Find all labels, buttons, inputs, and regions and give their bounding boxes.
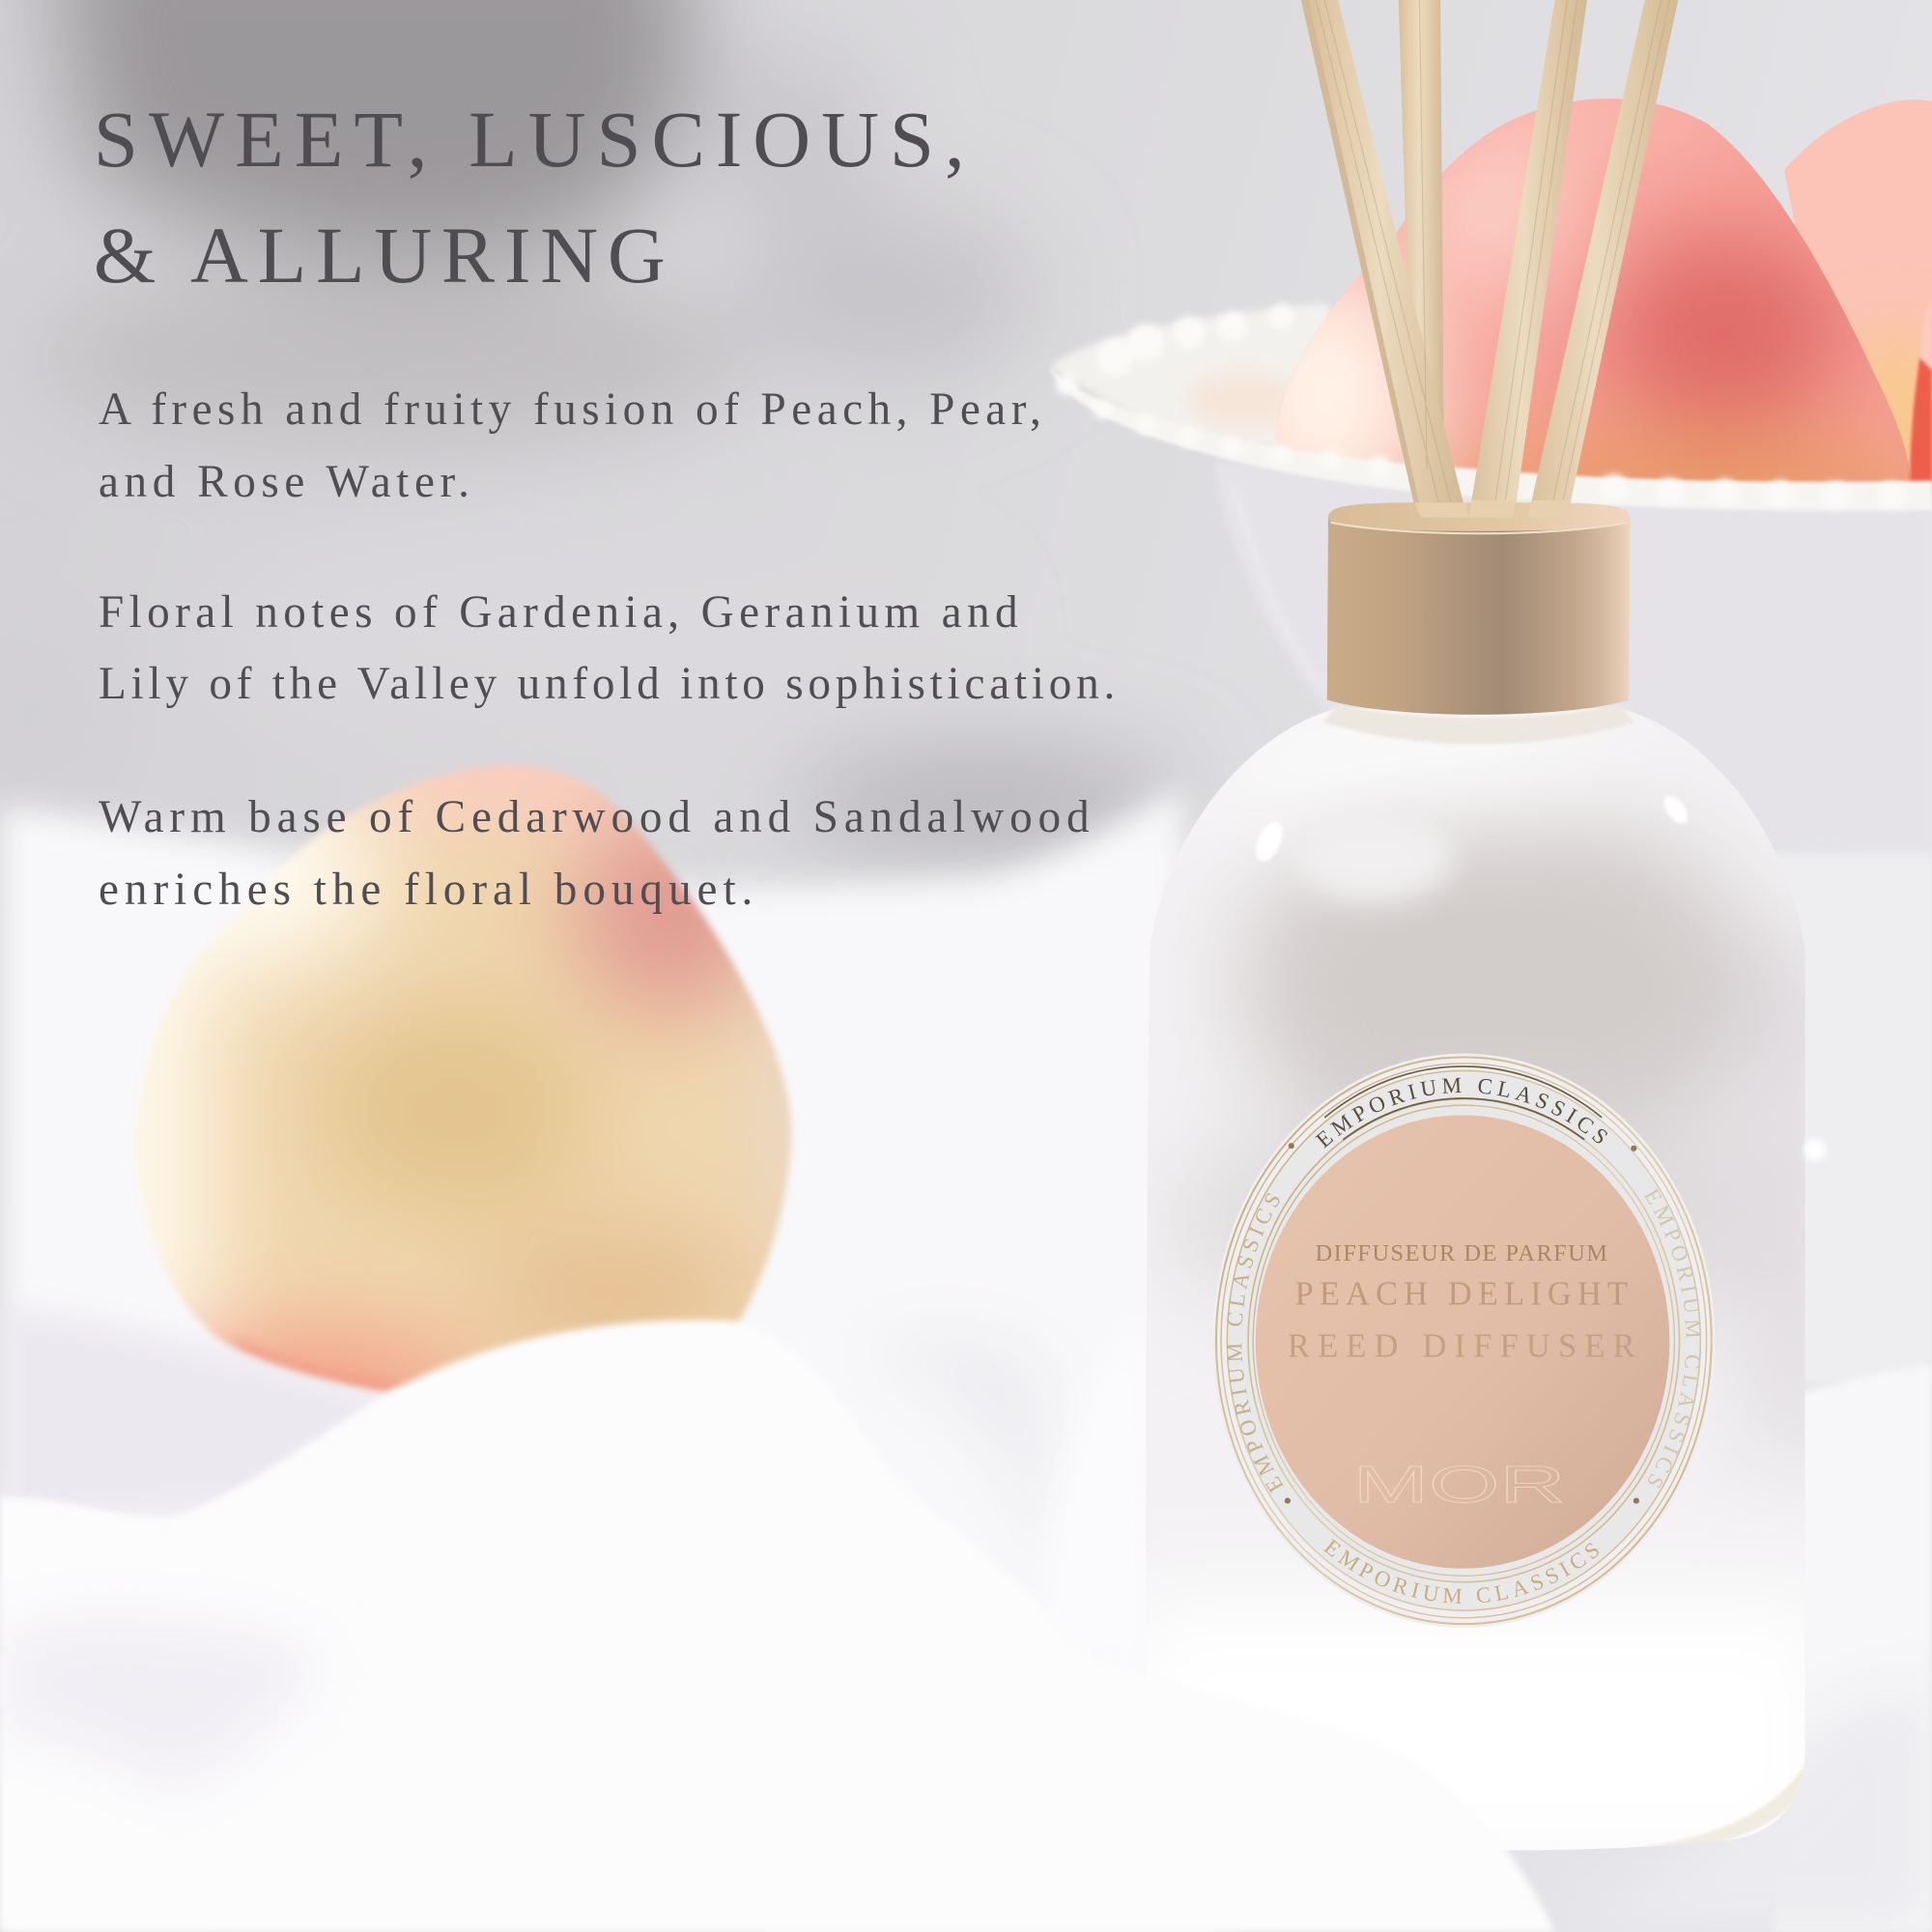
- fruit stand bowl: [1213, 462, 1932, 1382]
- text block: top notes: A fresh and fruity fusion of Peach, Pear,: [99, 384, 1041, 435]
- text block: floral notes: Floral notes of Gardenia, Geranium and: [99, 587, 1018, 638]
- label: text band: [1226, 1069, 1701, 1611]
- label: curved text left: EMPORIUM CLASSICS: [1227, 1193, 1284, 1493]
- label: dark foil arcs: [1324, 1066, 1602, 1140]
- label: MOR logo: MOR: [1353, 1456, 1565, 1514]
- label: diffuseur text: DIFFUSEUR DE PARFUM: [1316, 1240, 1607, 1266]
- peach: far right sliver: [1910, 296, 1932, 487]
- label: outer white ring: [1212, 1054, 1716, 1628]
- text block: base notes: enriches the floral bouquet.: [99, 865, 753, 915]
- label: gold border rings: [1216, 1057, 1712, 1624]
- title: SWEET, LUSCIOUS,: [94, 95, 965, 184]
- peach: back main: [1275, 99, 1911, 484]
- bottle: shading: [1109, 721, 1848, 1886]
- label: curved text right: EMPORIUM CLASSICS: [1644, 1187, 1700, 1488]
- text block: floral notes: [99, 587, 1115, 709]
- label: separator dots: [1285, 1143, 1639, 1504]
- bottle: [1147, 707, 1826, 1851]
- text block: base notes: Warm base of Cedarwood and Sandalwood: [99, 792, 1090, 842]
- stand rim back: [1050, 303, 1479, 469]
- label: peach centre panel: [1256, 1115, 1669, 1569]
- label: reed diffuser text: REED DIFFUSER: [1288, 1327, 1635, 1364]
- label: curved text bottom: EMPORIUM CLASSICS: [1323, 1538, 1599, 1604]
- text block: top notes: [99, 384, 1041, 507]
- peach: back right: [1784, 99, 1932, 493]
- text block: top notes: and Rose Water.: [99, 457, 469, 507]
- text block: floral notes: Lily of the Valley unfold into sophistication.: [99, 659, 1115, 709]
- reed ends over cap: [1414, 500, 1571, 518]
- cloth: white fabric backdrop: [0, 788, 1932, 1932]
- title: & ALLURING: [94, 211, 666, 299]
- cloth: foreground fold: [0, 1321, 1555, 1932]
- reeds: [1301, 0, 1678, 518]
- title: [94, 95, 965, 299]
- peach: foreground: [134, 763, 795, 1396]
- stand rim front with beads: [1050, 304, 1932, 511]
- label: peach delight text: PEACH DELIGHT: [1295, 1276, 1628, 1313]
- product label: [1215, 1053, 1715, 1628]
- text block: base notes: [99, 792, 1090, 915]
- bottle cap: [1327, 502, 1631, 715]
- label: curved text top: EMPORIUM CLASSICS: [1315, 1078, 1607, 1149]
